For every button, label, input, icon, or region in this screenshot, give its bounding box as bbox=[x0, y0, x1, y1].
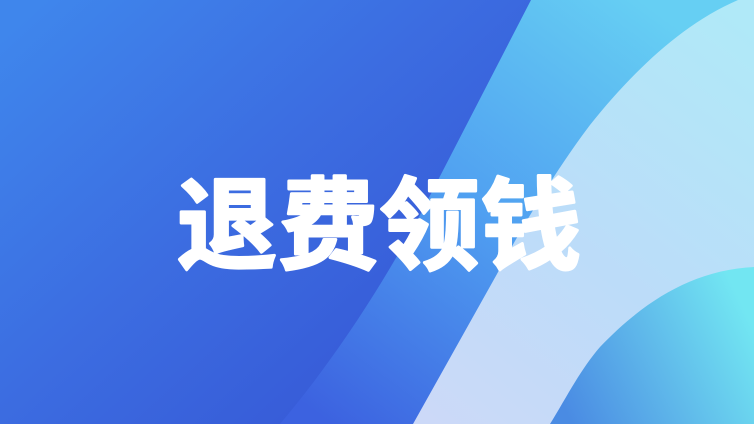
teal corner wave bbox=[550, 267, 754, 424]
title: 退费领钱 bbox=[177, 171, 581, 283]
middle blue wave band bbox=[280, 0, 754, 424]
light blue wave band bbox=[413, 0, 754, 424]
